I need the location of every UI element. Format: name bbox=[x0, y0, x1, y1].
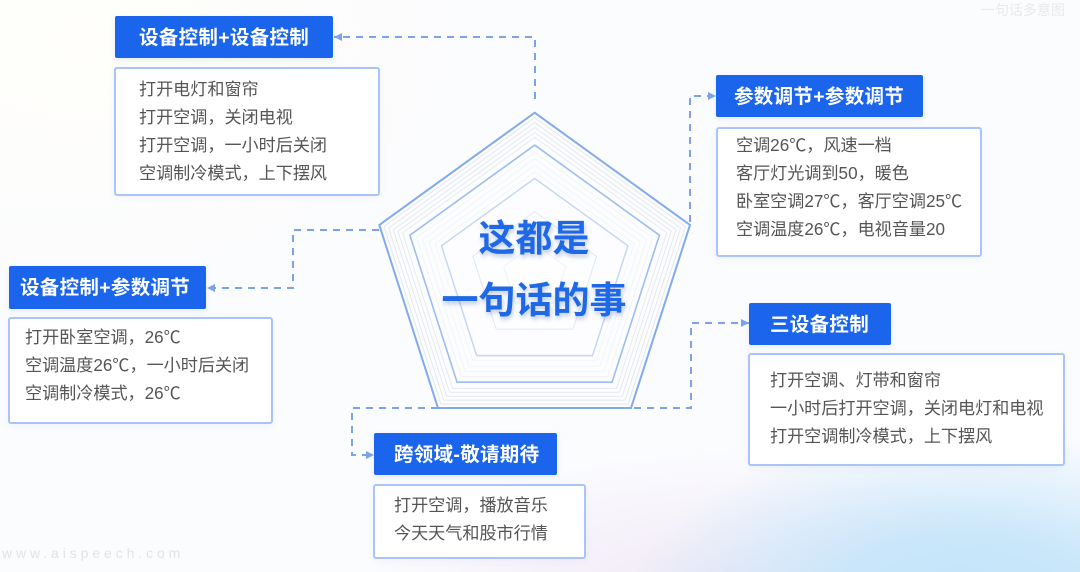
heading: device + device: 设备控制+设备控制 bbox=[139, 27, 309, 49]
panel: device + device: 打开电灯和窗帘 bbox=[139, 80, 259, 99]
panel: device + param: 空调温度26℃，一小时后关闭 bbox=[25, 356, 249, 375]
panel: cross domain bbox=[373, 484, 586, 559]
heading: cross domain bbox=[374, 433, 557, 475]
heading: param + param: 参数调节+参数调节 bbox=[734, 86, 904, 108]
watermark: top right: 一句话多意图 bbox=[981, 2, 1065, 18]
heading: device + param: 设备控制+参数调节 bbox=[20, 277, 190, 299]
heading: three devices bbox=[749, 303, 891, 345]
panel: three devices bbox=[748, 353, 1065, 466]
center title bbox=[442, 218, 628, 322]
panel: param + param: 空调温度26℃，电视音量20 bbox=[736, 220, 945, 239]
panel: param + param: 空调26℃，风速一档 bbox=[736, 136, 892, 155]
heading: device + device bbox=[115, 16, 333, 58]
panel: cross domain: 今天天气和股市行情 bbox=[394, 524, 548, 543]
watermark: website: www.aispeech.com bbox=[2, 545, 184, 561]
panel: device + device: 打开空调，关闭电视 bbox=[139, 108, 293, 127]
panel: device + device: 空调制冷模式，上下摆风 bbox=[139, 164, 327, 183]
panel: device + device bbox=[114, 67, 380, 196]
panel: device + device: 打开空调，一小时后关闭 bbox=[139, 136, 327, 155]
center title: 这都是 bbox=[478, 218, 590, 259]
heading: three devices: 三设备控制 bbox=[770, 314, 869, 336]
panel: param + param bbox=[716, 127, 982, 257]
panel: device + param: 空调制冷模式，26℃ bbox=[25, 384, 181, 403]
panel: three devices: 一小时后打开空调，关闭电灯和电视 bbox=[770, 399, 1044, 418]
panel: param + param: 卧室空调27℃，客厅空调25℃ bbox=[736, 192, 962, 211]
heading: param + param bbox=[716, 75, 923, 117]
panel: device + param bbox=[8, 317, 273, 424]
center title: 一句话的事 bbox=[442, 280, 626, 321]
panel: three devices: 打开空调、灯带和窗帘 bbox=[770, 371, 941, 390]
panel: three devices: 打开空调制冷模式，上下摆风 bbox=[770, 427, 992, 446]
panel: param + param: 客厅灯光调到50，暖色 bbox=[736, 164, 909, 183]
connector arrows bbox=[207, 37, 749, 455]
heading: cross domain: 跨领域-敬请期待 bbox=[394, 444, 539, 466]
panel: cross domain: 打开空调，播放音乐 bbox=[394, 496, 548, 515]
panel: device + param: 打开卧室空调，26℃ bbox=[25, 328, 181, 347]
heading: device + param bbox=[9, 266, 206, 309]
